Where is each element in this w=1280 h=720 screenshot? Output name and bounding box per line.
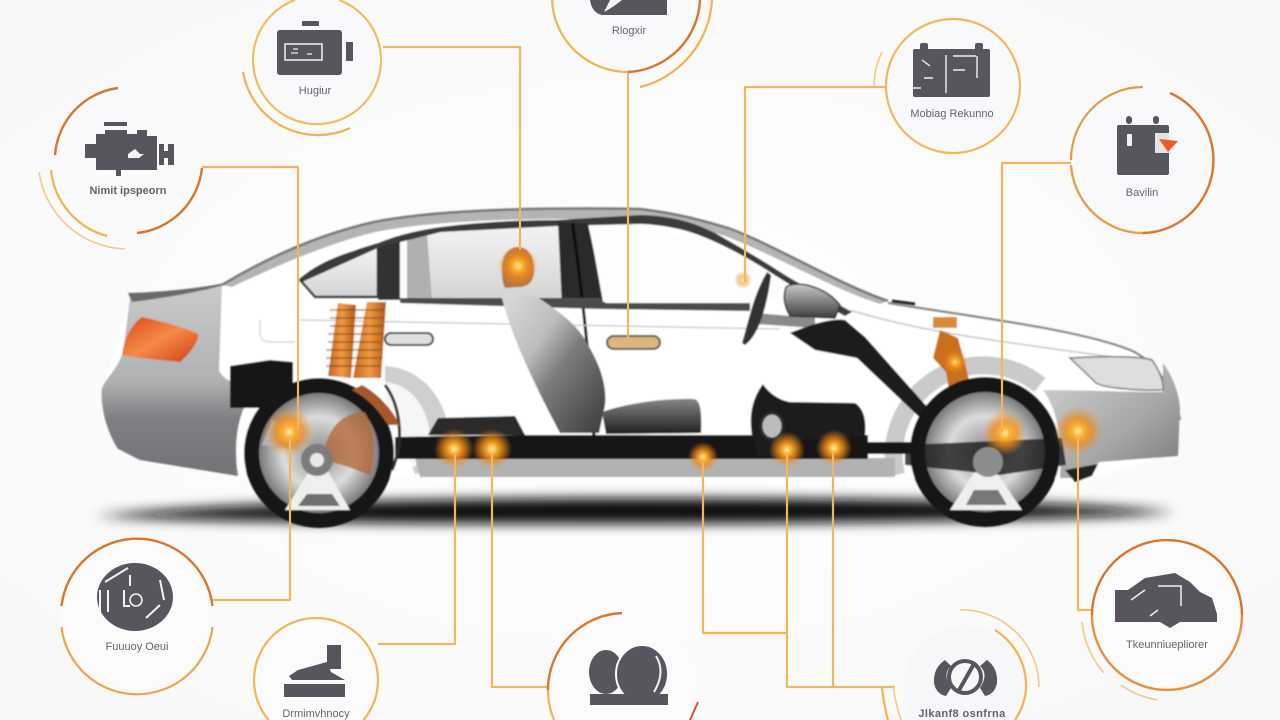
belt line <box>300 320 780 329</box>
front bumper lower <box>1065 464 1098 482</box>
rear springs <box>326 302 386 378</box>
callout: engine left <box>39 88 202 249</box>
callout: bottom left <box>61 538 213 694</box>
outer arc <box>874 52 882 87</box>
callout: bottom fourth <box>882 610 1039 720</box>
label: Jlkanf8 osnfrna <box>918 708 1006 720</box>
label: Drmimvhnocy <box>282 708 350 720</box>
hood lines <box>888 303 1180 420</box>
callout: top right battery module <box>874 19 1020 153</box>
headlight <box>1070 357 1163 390</box>
outer arc <box>243 72 350 135</box>
callout: bottom right <box>1082 540 1242 700</box>
label: Hugiur <box>299 85 332 97</box>
rings <box>62 539 212 694</box>
icon: brake gauge <box>934 660 997 696</box>
tail light <box>122 317 198 362</box>
rings <box>39 88 202 249</box>
rear body panel <box>102 286 248 476</box>
icon: drivetrain unit <box>1115 573 1217 628</box>
rear pillars <box>378 240 400 300</box>
label: Tkeunniuepliorer <box>1126 639 1208 651</box>
dash mirror <box>784 284 840 318</box>
rings <box>882 610 1039 720</box>
icon: cropped unit <box>590 0 667 15</box>
car body shell <box>102 208 1180 480</box>
floor sill <box>415 458 895 477</box>
label: Bavilin <box>1126 187 1158 199</box>
window ledge <box>400 298 750 311</box>
icon: brake drum <box>589 645 668 705</box>
callout: far right battery <box>1071 87 1215 233</box>
callout: bottom second <box>254 618 378 720</box>
seat back <box>502 293 605 433</box>
front body panel <box>1043 363 1180 478</box>
label: Fuuuoy Oeui <box>106 641 168 653</box>
icon: battery <box>1117 116 1178 175</box>
roof band <box>222 209 888 304</box>
icon: pedal <box>284 645 345 697</box>
callout: top center <box>552 0 712 87</box>
upper dark window frame <box>300 215 852 316</box>
rear fender arch <box>385 366 450 474</box>
steering rod <box>755 313 815 328</box>
brake assembly <box>325 412 374 475</box>
icon: engine <box>85 122 174 176</box>
connector lines <box>202 47 1093 687</box>
rear door window <box>427 224 562 298</box>
headrest <box>502 247 534 288</box>
callout: top left <box>243 0 381 135</box>
front footwell parts <box>751 384 865 456</box>
rings <box>1082 540 1242 700</box>
spoiler edge <box>128 283 232 302</box>
front door window <box>590 228 788 302</box>
ground shadow <box>95 498 1175 524</box>
label: Nimit ipspeorn <box>89 185 167 197</box>
battery tray <box>428 416 525 435</box>
seat cushion <box>602 399 701 434</box>
rings <box>1071 87 1213 233</box>
icon: gear cluster <box>97 563 173 631</box>
center pillar <box>558 222 606 306</box>
rear black box <box>230 360 293 408</box>
front wheel <box>905 377 1066 527</box>
door handles <box>385 333 433 345</box>
steering wheel <box>742 272 771 345</box>
car illustration <box>102 208 1180 528</box>
icon: control module <box>277 21 353 75</box>
steering column <box>790 320 945 432</box>
icon: module <box>913 43 990 97</box>
label: Rlogxir <box>612 25 646 37</box>
rings <box>548 613 698 720</box>
fuel door <box>260 320 295 342</box>
glow points <box>265 246 1102 472</box>
rear wheel <box>244 378 400 528</box>
rings <box>552 0 712 87</box>
callout: bottom center <box>548 613 702 720</box>
floor chassis bar <box>395 435 912 459</box>
rear quarter window <box>300 246 378 297</box>
front spring <box>933 317 980 433</box>
label: Mobiag Rekunno <box>910 108 994 120</box>
front fender arch <box>894 365 1040 475</box>
